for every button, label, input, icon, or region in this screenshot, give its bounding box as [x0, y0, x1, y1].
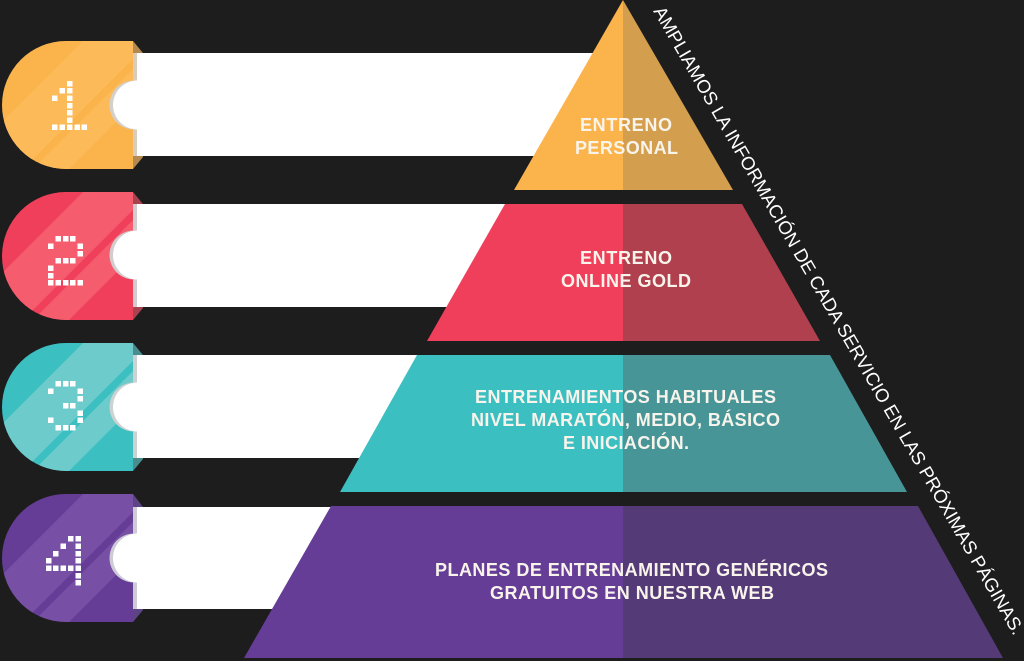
pyramid tier 4: planes gratuitos: PLANES DE ENTRENAMIENTO GENÉRICOS: [435, 559, 828, 580]
pyramid tier 2: entreno online gold: ONLINE GOLD: [561, 271, 691, 291]
tab 4: [2, 494, 133, 622]
digit 2: [48, 236, 83, 286]
notch 4: [110, 507, 162, 609]
pyramid tier 1: entreno personal: ENTRENO: [580, 115, 672, 135]
pyramid tier 3: entrenamientos habituales: E INICIACIÓN.: [563, 432, 689, 453]
diagonal note: AMPLIAMOS LA INFORMACIÓN DE CADA SERVICIO EN LAS PRÓXIMAS PÁGINAS.: [650, 3, 1024, 638]
fold: purple tab: [133, 494, 143, 622]
white bar 2: [133, 204, 513, 307]
white bar 4: [133, 507, 333, 609]
pyramid tier 4: planes gratuitos: [244, 506, 1003, 658]
pyramid tier 1: entreno personal: [514, 0, 733, 190]
tab 3: [2, 343, 133, 471]
pyramid tier 4: planes gratuitos: GRATUITOS EN NUESTRA WEB: [490, 583, 774, 603]
notch 3: [110, 355, 162, 458]
fold: orange tab: [133, 41, 143, 169]
digit 4: [46, 536, 81, 586]
pyramid tier 3: entrenamientos habituales: [340, 355, 907, 492]
fold: teal tab: [133, 343, 143, 471]
pyramid tier 3: entrenamientos habituales: ENTRENAMIENTOS HABITUALES: [475, 387, 776, 407]
digit 1: [52, 81, 87, 130]
white bar 3: [133, 355, 423, 458]
tab 1: [2, 41, 133, 169]
tab 2: [2, 192, 133, 320]
pyramid tier 2: entreno online gold: [427, 204, 820, 341]
row 1: number tab and white bar: [2, 41, 592, 169]
fold: red tab: [133, 192, 143, 320]
pyramid tier 3: entrenamientos habituales: NIVEL MARATÓN, MEDIO, BÁSICO: [471, 409, 780, 430]
pyramid tier 1: entreno personal: PERSONAL: [575, 138, 678, 158]
row 4: number tab and white bar: [2, 494, 330, 622]
row 2: number tab and white bar: [2, 192, 505, 320]
notch 2: [110, 204, 162, 307]
notch 1: [110, 53, 162, 156]
digit 3: [48, 381, 83, 430]
pyramid tier 2: entreno online gold: ENTRENO: [580, 248, 672, 268]
white bar 1: [133, 53, 613, 156]
row 3: number tab and white bar: [2, 343, 417, 471]
